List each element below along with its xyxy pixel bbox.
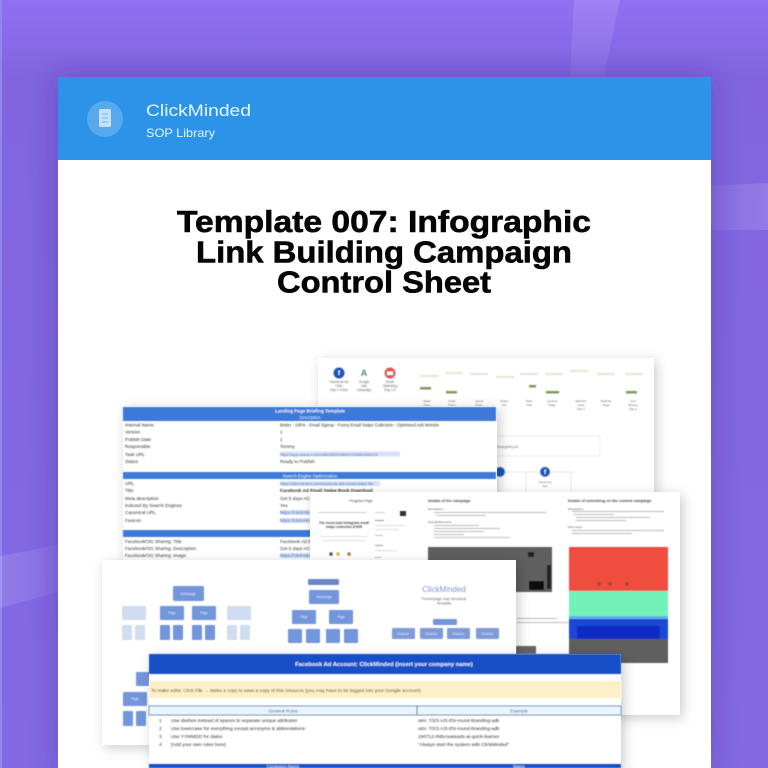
sheet: landing page briefing table: https://clickminded	[280, 553, 318, 558]
flow page columns: Day 3	[629, 407, 637, 411]
flow page columns: Page	[548, 403, 556, 407]
brand heading on diagram	[422, 585, 466, 606]
flow icons row: Email	[386, 380, 394, 384]
rules rows: 2	[159, 726, 162, 732]
partial tree lower left: Page	[131, 697, 139, 701]
flow page columns	[420, 370, 643, 411]
brand heading on diagram: ClickMinded	[422, 585, 466, 594]
flow page columns: Page	[423, 403, 431, 407]
row of boxes: Channel	[425, 632, 437, 636]
tree diagram one: Page	[200, 611, 208, 615]
sheet: flow diagram top right	[318, 358, 654, 508]
sheet: flow diagram top right: Ads	[542, 484, 548, 488]
rules rows: "Always start the system with ClickMinded"	[418, 742, 509, 748]
title: Control Sheet	[277, 266, 491, 300]
flow page columns: Thank	[500, 399, 509, 403]
right column: Next steps:	[568, 525, 583, 529]
sheet: landing page briefing table: Facebook/OG Sharing: Title	[125, 539, 182, 544]
tree diagram two	[288, 579, 358, 643]
sheet: site structure diagrams	[102, 560, 516, 745]
brand heading on diagram: Template	[437, 602, 451, 606]
blue title banner: Facebook Ad Account: ClickMinded (insert your company name)	[295, 662, 473, 668]
flow icons row: Click	[336, 384, 343, 388]
sheet: landing page briefing table: Version	[125, 430, 141, 434]
sheet: landing page briefing table: Meta description	[125, 496, 159, 501]
bottom blue row	[149, 764, 621, 768]
table header: Example	[510, 708, 528, 714]
outlined note box	[460, 436, 600, 456]
details column: Details of the campaign	[428, 499, 471, 503]
sheet: page documentation with colour blocks	[310, 492, 680, 715]
tree diagram two: Page	[300, 615, 308, 619]
flow page columns: Member	[575, 399, 587, 403]
video thumbnail	[428, 547, 552, 592]
flow page columns: Webinar	[600, 399, 612, 403]
flow page columns: Page	[475, 403, 483, 407]
table header	[149, 706, 621, 715]
rules rows: Use lowercase for everything except acronyms & abbreviations	[171, 726, 305, 732]
program page mockup: swipe collection EVER	[326, 525, 363, 529]
rules rows: Use dashes instead of spaces to separate unique attributes	[171, 718, 298, 724]
rules rows: 3	[159, 734, 162, 740]
sheet: landing page briefing table: Landing Page Briefing Template	[275, 408, 345, 414]
sheet: landing page briefing table: Description	[300, 415, 321, 420]
flow page columns: Start	[526, 399, 532, 403]
sheet: landing page briefing table: Responsible	[125, 444, 151, 449]
sheet: landing page briefing table: Get 5 days ACCESS	[280, 546, 322, 551]
card header	[58, 77, 711, 160]
partial tree lower left	[123, 672, 156, 726]
sheet: landing page briefing table	[123, 406, 497, 566]
right column	[568, 499, 664, 534]
flow page columns: Form	[448, 403, 456, 407]
sheet: landing page briefing table: Facebook/OG Sharing: Description	[125, 546, 197, 551]
sheet: landing page briefing table: https://app.asana.com/0/981265243890/1234567890123	[280, 452, 378, 457]
blue title banner	[149, 654, 621, 674]
sheet: landing page briefing table: Internal Name	[125, 422, 154, 428]
details column: Description:	[428, 507, 444, 511]
sheet: landing page briefing table: URL	[125, 481, 135, 486]
sheet: flow diagram top right: f	[544, 470, 547, 476]
sheet: flow diagram top right: Retargeting list	[497, 445, 518, 449]
sheet: landing page briefing table: Facebook/OG Sharing: Image	[125, 553, 186, 558]
tree diagram one: Page	[168, 611, 176, 615]
tree diagram two: Homepage	[316, 595, 332, 599]
flow icons row: Day 1-3 Ads	[330, 388, 348, 392]
title: Link Building Campaign	[196, 236, 572, 270]
sheet: landing page briefing table: Indexed By Search Engines	[125, 503, 182, 508]
sheet: landing page briefing table: https://clickminded.com/facebook-ads-email-swipe-file	[280, 481, 373, 486]
rules rows: [Add your own rules here]	[171, 742, 226, 748]
sheet: landing page briefing table: Better - 100% - Email Signup - Funny Email Swipe Collection - Optimized Ads Monitor	[280, 422, 440, 428]
flow icons row: Google	[359, 380, 369, 384]
right column: Description:	[568, 507, 584, 511]
tree diagram one: Homepage	[180, 592, 196, 596]
row of boxes: Channel	[481, 632, 493, 636]
sheet: landing page briefing table: Favicon	[125, 518, 142, 523]
flow page columns: Sales	[423, 399, 431, 403]
sheet: landing page briefing table: Ready to Publish	[280, 459, 315, 464]
flow page columns: Area	[578, 403, 584, 407]
details column: Special Elements:	[428, 520, 452, 524]
sheet: Facebook ad account naming	[149, 654, 621, 768]
row of boxes	[392, 619, 499, 639]
flow icons row: Marketing	[383, 384, 397, 388]
sheet: landing page briefing table: Task URL	[125, 452, 145, 457]
sheet: landing page briefing table: Status	[125, 459, 139, 464]
flow icons row	[330, 368, 397, 392]
sheet: landing page briefing table: Facebook Ad Email Swipe Book Download	[280, 488, 373, 493]
sheet: landing page briefing table: Yes	[280, 503, 288, 508]
flow page columns: Stream	[628, 403, 638, 407]
flow page columns: Day 2	[577, 407, 585, 411]
rules rows: Use YYMMDD for dates	[171, 734, 223, 740]
rules rows	[159, 718, 509, 748]
flow page columns: Upsell	[475, 399, 483, 403]
flow icons row: Facebook Ad	[330, 380, 349, 384]
sheet: landing page briefing table: Tommy	[280, 444, 296, 449]
row of boxes: Channel	[452, 632, 464, 636]
flow page columns: You	[501, 403, 507, 407]
sheet: landing page briefing table: Canonical URL	[125, 510, 156, 515]
rules rows: utm: 7/2/1-US-EN-round-branding-adk	[418, 718, 500, 724]
yellow instruction: To make edits: Click File → Make a copy to save a copy of this resource (you may have to be logged into your Google account)	[151, 688, 421, 694]
sheet: flow diagram top right: Facebook	[538, 480, 552, 484]
sheet: landing page briefing table: 1	[280, 430, 283, 434]
flow icons row: Ads	[361, 384, 367, 388]
flow icons row: f	[338, 371, 341, 377]
sheet: landing page briefing table: Facebook Ad Email	[280, 539, 320, 544]
main white card	[58, 77, 711, 768]
right column: Details of something on the content campaign	[568, 499, 652, 503]
program page mockup	[318, 499, 406, 558]
rules rows: 190712-INBcreateads-ai-quick-learner	[418, 734, 500, 740]
flow page columns: Page	[602, 403, 610, 407]
subtitle: SOP Library	[146, 126, 215, 140]
row of boxes: Channel	[397, 632, 409, 636]
title: Template 007: Infographic	[177, 205, 591, 239]
rules rows: 4	[159, 742, 162, 748]
sheet: landing page briefing table: Title	[125, 488, 134, 493]
sheet: landing page briefing table: https://clickminded	[280, 510, 318, 515]
flow page columns: Order	[448, 399, 456, 403]
rules rows: utm: 7/2/1-US-EN-round-branding-adk	[418, 726, 500, 732]
flow icons row: A	[361, 368, 368, 378]
title	[177, 205, 591, 300]
sheet: landing page briefing table: 1	[280, 437, 283, 442]
rules rows: 1	[159, 718, 162, 724]
flow page columns: Live	[630, 399, 636, 403]
sheet: landing page briefing table: Search Engine Optimization	[283, 474, 338, 478]
flow page columns: Trial	[526, 403, 532, 407]
follow-up boxes	[498, 472, 530, 502]
sheet: landing page briefing table: https://clickminded	[280, 518, 318, 523]
details column	[428, 499, 569, 654]
tree diagram two: Page	[337, 615, 345, 619]
program page mockup: Program Page	[349, 499, 373, 503]
program page mockup: The most-sold Instagram email	[319, 521, 369, 525]
tree diagram one	[122, 586, 251, 640]
colour blocks	[569, 547, 668, 663]
table header: General Rules	[268, 708, 298, 714]
flow icons row: Campaign	[357, 388, 371, 392]
brand name: ClickMinded	[146, 101, 251, 120]
sheet: landing page briefing table: Get 5 days ACCESS	[280, 496, 322, 501]
flow icons row: Day 1-3	[384, 388, 396, 392]
brand heading on diagram: Funnel/page map Structural	[422, 597, 466, 601]
sheet: landing page briefing table: Publish Date	[125, 437, 151, 442]
icon: document in circle	[87, 101, 123, 137]
flow page columns: Content	[547, 399, 557, 403]
yellow instruction	[149, 681, 621, 698]
